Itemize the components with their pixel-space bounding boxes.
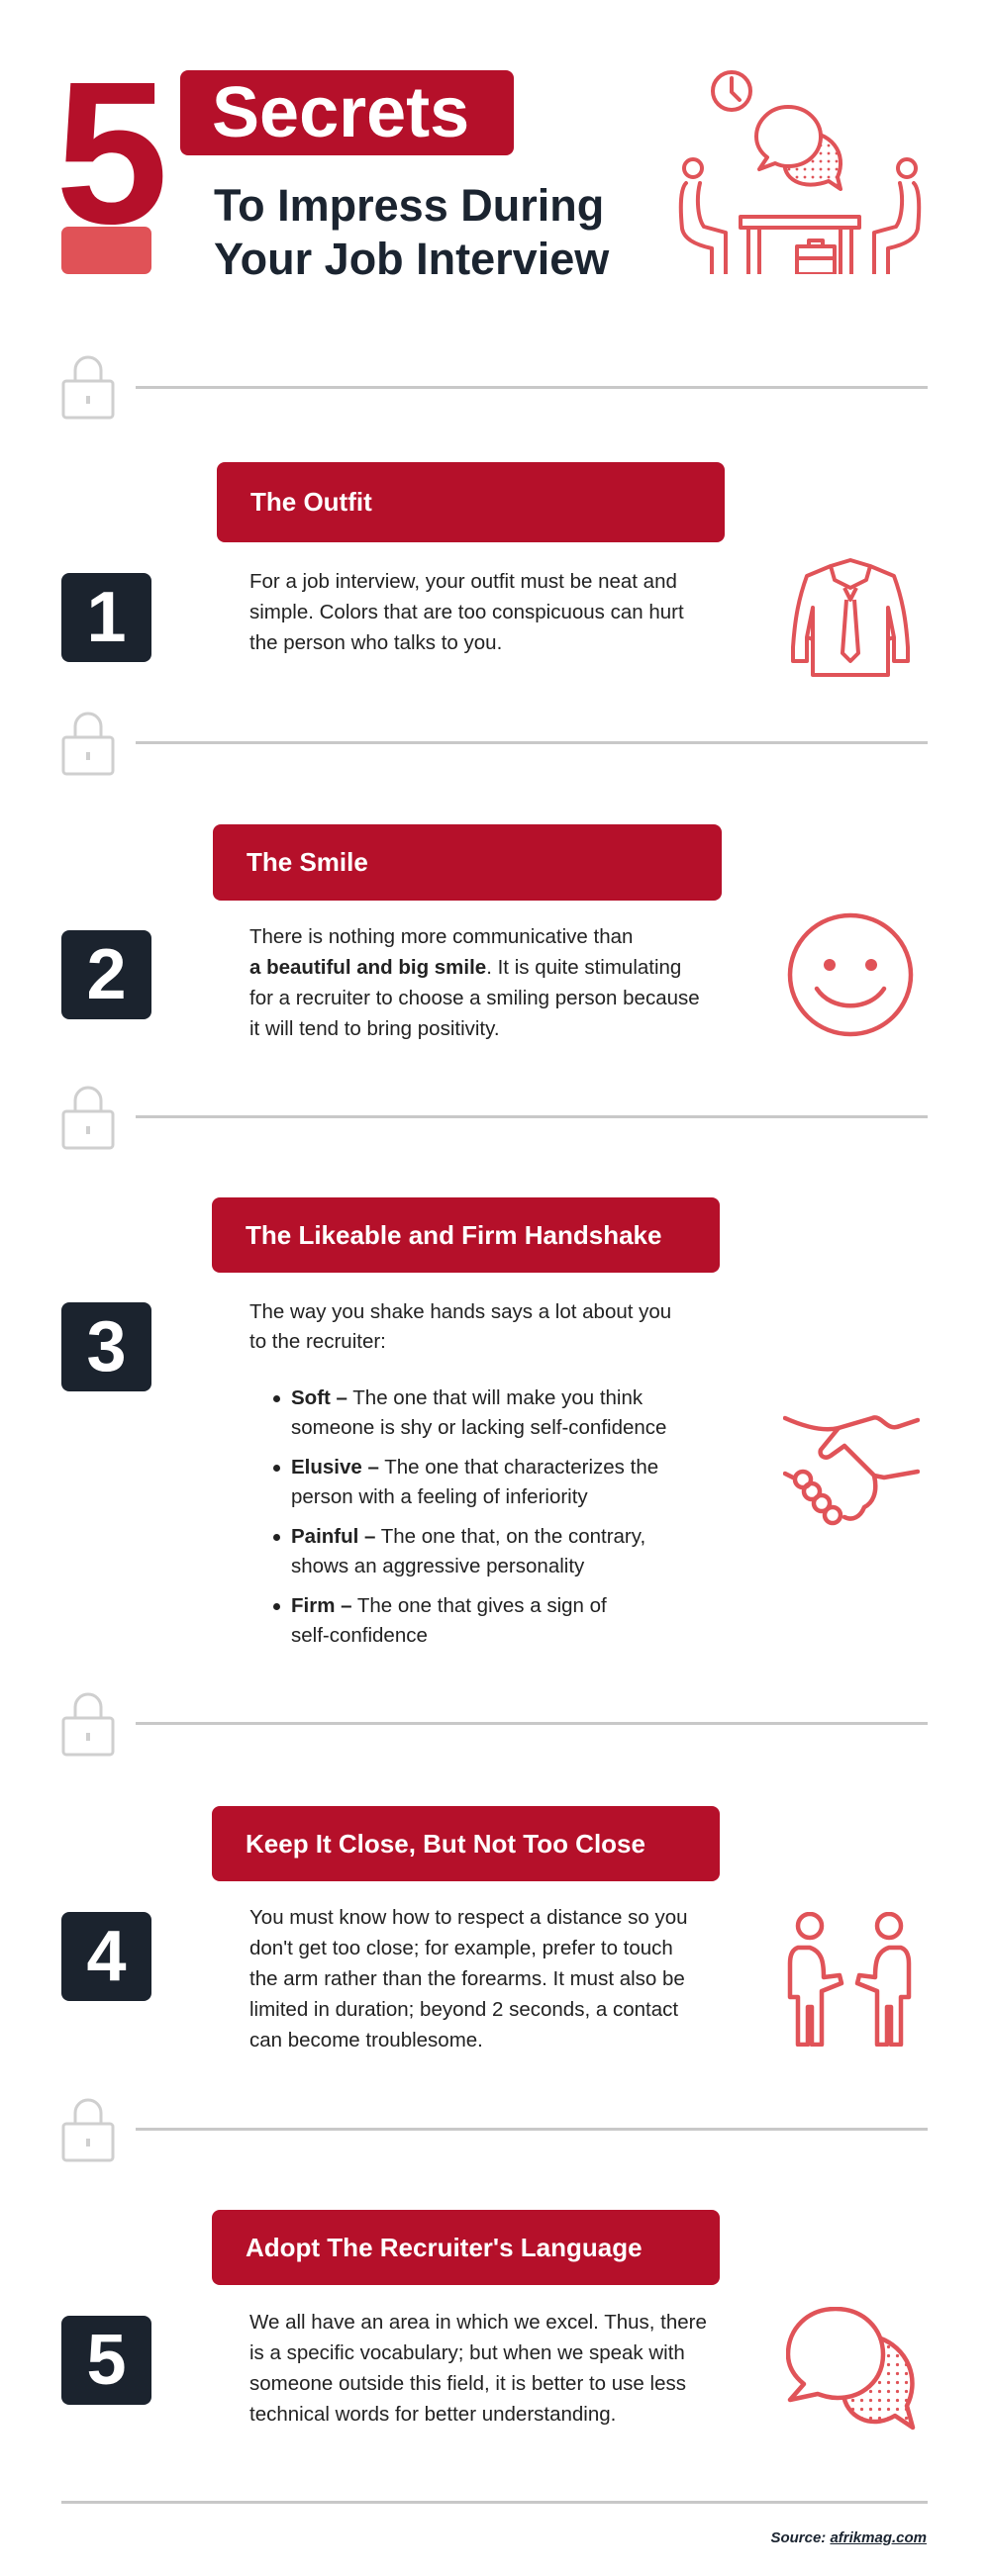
- icon: handshake: [783, 1415, 920, 1526]
- text block: You must know how to respect a distance so you: [249, 1906, 688, 1929]
- number badge: 3: [86, 1307, 127, 1386]
- subtitle: [214, 180, 610, 284]
- icon: lock: [61, 2098, 115, 2161]
- text block: [249, 1300, 671, 1352]
- number badge: [61, 1302, 151, 1391]
- heading: [212, 1197, 720, 1273]
- bullet list: person with a feeling of inferiority: [291, 1485, 588, 1508]
- icon: lock: [61, 1692, 115, 1756]
- panel: recruiter's language: [61, 2210, 915, 2431]
- text block: is a specific vocabulary; but when we speak with: [249, 2341, 685, 2364]
- icon: smiley: [788, 912, 913, 1037]
- panel: the smile: [61, 824, 913, 1040]
- bullet list: [273, 1386, 666, 1647]
- heading: Adopt The Recruiter's Language: [246, 2233, 643, 2262]
- text block: to the recruiter:: [249, 1330, 386, 1352]
- divider lock 5: [61, 2098, 928, 2161]
- text block: [249, 2311, 707, 2426]
- number badge: [61, 573, 151, 662]
- bullet list: shows an aggressive personality: [291, 1555, 584, 1577]
- title: big number 5: 5: [55, 40, 164, 266]
- heading: [213, 824, 722, 901]
- text block: The way you shake hands says a lot about you: [249, 1300, 671, 1323]
- text block: the person who talks to you.: [249, 631, 502, 654]
- title accent square: [61, 227, 151, 274]
- number badge: 2: [86, 935, 127, 1014]
- text block: the arm rather than the forearms. It must also be: [249, 1967, 685, 1990]
- icon: lock: [61, 713, 115, 776]
- bullet list: someone is shy or lacking self-confidence: [291, 1416, 666, 1439]
- subtitle: To Impress During: [214, 180, 604, 231]
- text block: technical words for better understanding.: [249, 2403, 616, 2426]
- text block: for a recruiter to choose a smiling person because: [249, 987, 700, 1009]
- text block: it will tend to bring positivity.: [249, 1017, 500, 1040]
- divider lock 2: [61, 713, 928, 776]
- text block: [249, 925, 700, 1040]
- bullet list: Firm – The one that gives a sign of: [291, 1594, 607, 1617]
- panel: keep it close: [61, 1806, 911, 2051]
- text block: simple. Colors that are too conspicuous can hurt: [249, 601, 684, 623]
- source: Source: afrikmag.com: [770, 2529, 927, 2546]
- icon: chat bubbles: [786, 2307, 915, 2431]
- heading: The Smile: [247, 847, 368, 877]
- icon: shirt: [791, 558, 910, 677]
- text block: a beautiful and big smile. It is quite stimulating: [249, 956, 681, 979]
- heading: [212, 1806, 720, 1881]
- bullet list: Soft – The one that will make you think: [291, 1386, 643, 1409]
- icon: lock: [61, 356, 115, 420]
- bottom divider: [61, 2501, 928, 2504]
- divider lock 4: [61, 1692, 928, 1756]
- panel: the outfit: [61, 462, 910, 677]
- bullet list: Elusive – The one that characterizes the: [291, 1456, 658, 1479]
- number badge: [61, 2316, 151, 2405]
- illustration: interview scene: [679, 70, 921, 274]
- heading: Keep It Close, But Not Too Close: [246, 1829, 645, 1859]
- text block: There is nothing more communicative than: [249, 925, 633, 948]
- number badge: 1: [86, 578, 127, 657]
- panel: handshake: [61, 1197, 920, 1647]
- heading: The Likeable and Firm Handshake: [246, 1219, 661, 1249]
- text block: don't get too close; for example, prefer to touch: [249, 1937, 673, 1959]
- heading: [217, 462, 725, 542]
- icon: lock: [61, 1087, 115, 1150]
- text block: [249, 1906, 688, 2051]
- text block: can become troublesome.: [249, 2029, 483, 2051]
- bullet list: Painful – The one that, on the contrary,: [291, 1525, 645, 1548]
- subtitle: Your Job Interview: [214, 234, 609, 284]
- divider lock 3: [61, 1087, 928, 1150]
- number badge: 5: [86, 2321, 127, 2400]
- icon: two people: [788, 1912, 911, 2047]
- text block: limited in duration; beyond 2 seconds, a contact: [249, 1998, 678, 2021]
- text block: We all have an area in which we excel. Thus, there: [249, 2311, 707, 2334]
- heading: [212, 2210, 720, 2285]
- number badge: [61, 930, 151, 1019]
- number badge: 4: [86, 1917, 127, 1996]
- divider lock 1: [61, 356, 928, 420]
- heading: The Outfit: [250, 487, 372, 517]
- title: Secrets box: Secrets: [212, 73, 469, 152]
- text block: For a job interview, your outfit must be neat and: [249, 570, 677, 593]
- bullet list: self-confidence: [291, 1624, 428, 1647]
- text block: someone outside this field, it is better to use less: [249, 2372, 686, 2395]
- number badge: [61, 1912, 151, 2001]
- text block: [249, 570, 684, 654]
